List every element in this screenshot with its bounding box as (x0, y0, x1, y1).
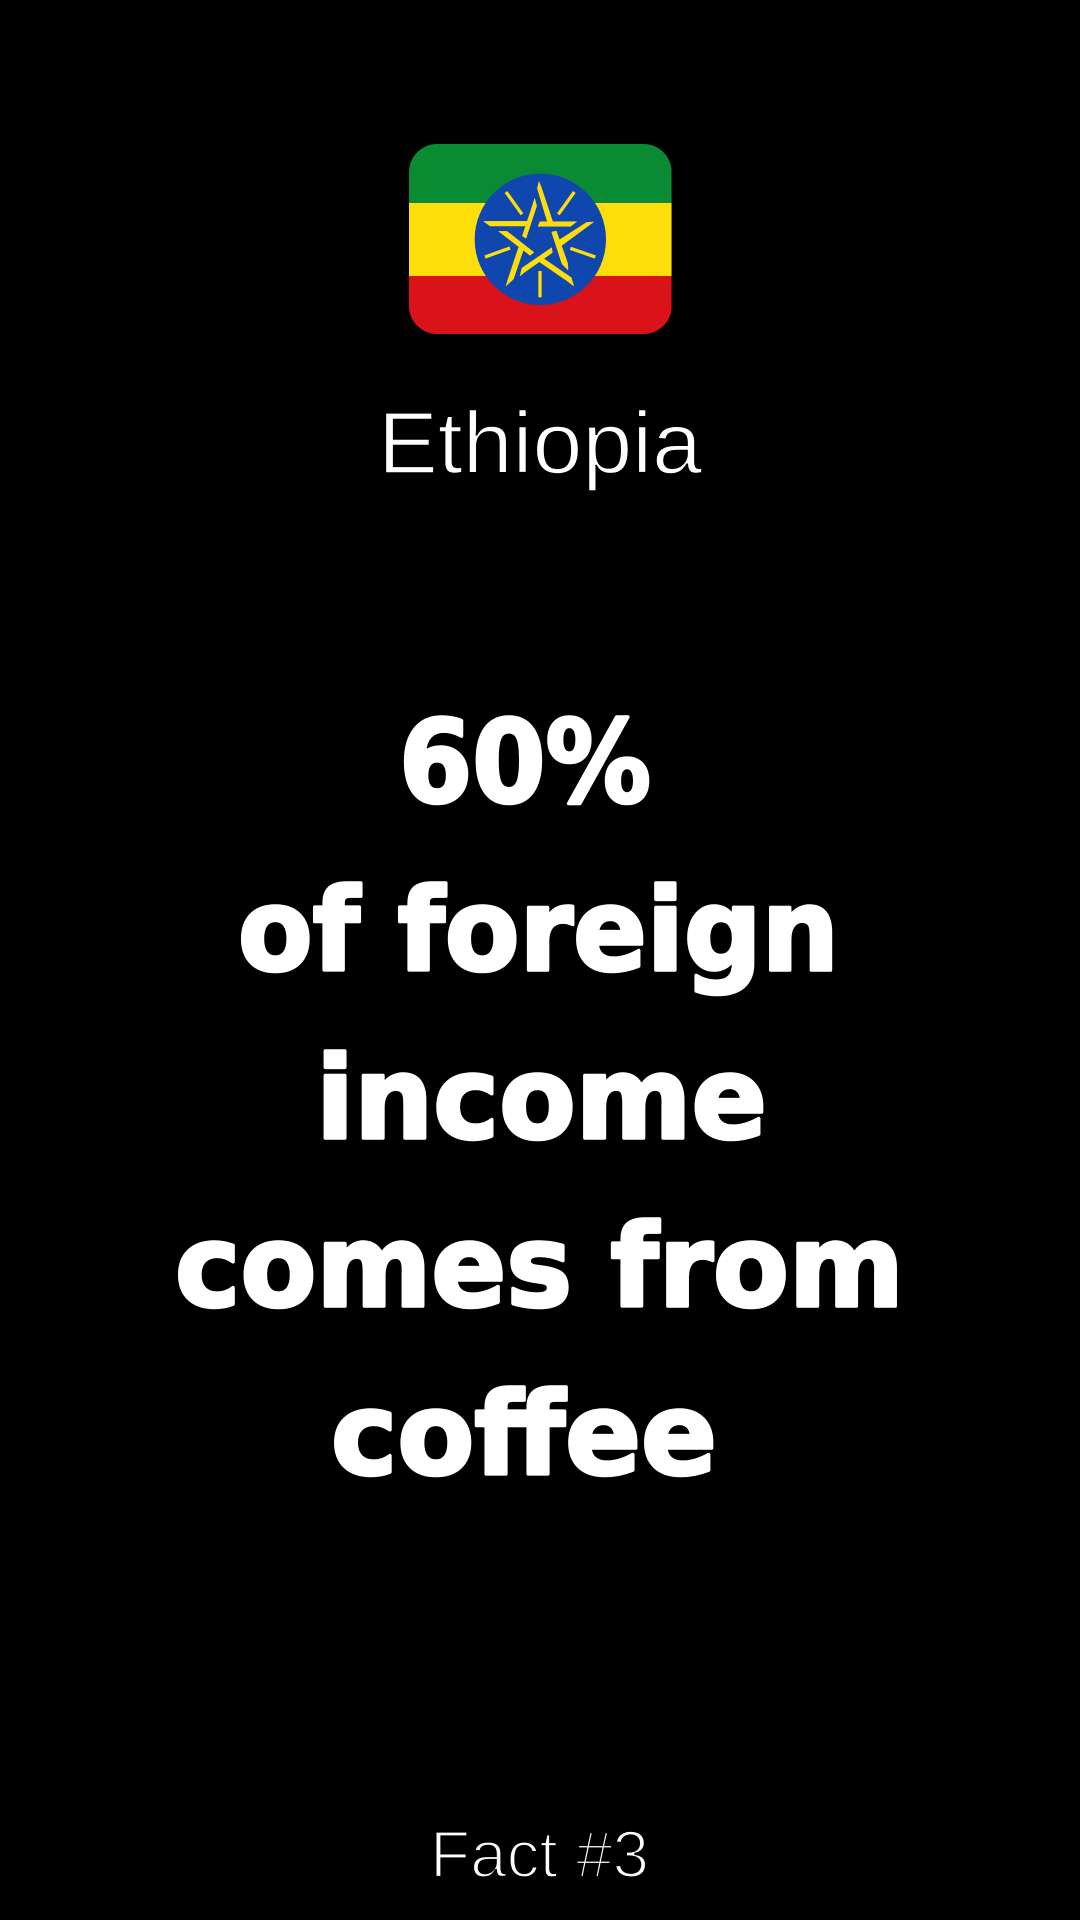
headline statistic: income (316, 1032, 767, 1165)
country name: Ethiopia (378, 395, 703, 492)
fact number: Fact #3 (430, 1817, 649, 1891)
icon: Ethiopian flag (409, 144, 672, 334)
headline statistic (175, 696, 904, 1501)
infographic canvas (178, 144, 897, 1876)
headline statistic: comes from (175, 1200, 904, 1333)
headline statistic: of foreign (238, 864, 839, 997)
headline statistic: 60% (399, 696, 651, 829)
headline statistic: coffee (331, 1368, 717, 1501)
